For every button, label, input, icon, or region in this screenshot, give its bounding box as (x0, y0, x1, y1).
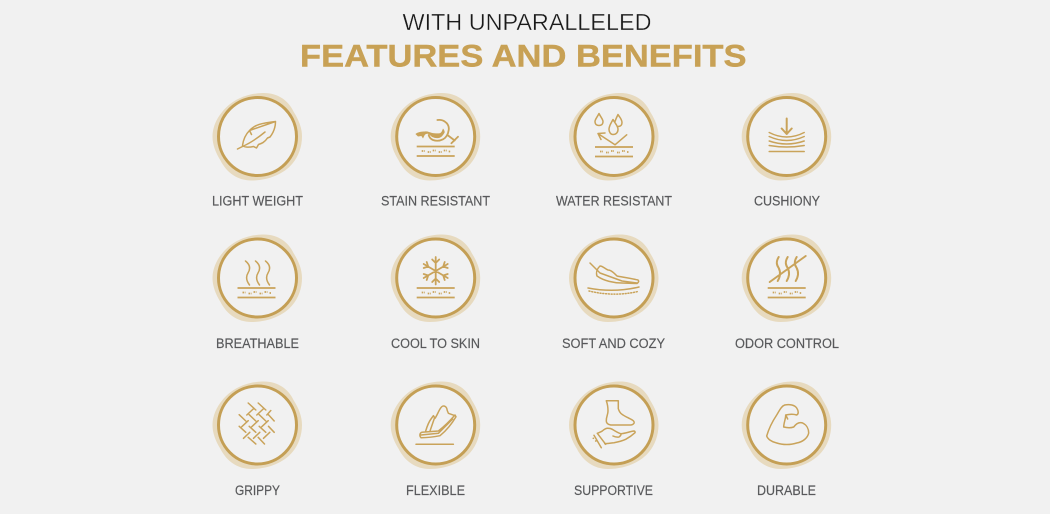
label: STAIN RESISTANT (381, 194, 490, 209)
icon: feather (212, 93, 302, 180)
feature: supportive (569, 381, 658, 498)
label: COOL TO SKIN (391, 336, 480, 351)
icon: feather on cushion (569, 234, 658, 322)
feature: water resistant (556, 93, 672, 209)
label: ODOR CONTROL (735, 336, 839, 351)
icon: wine glass stain (391, 93, 480, 180)
label: GRIPPY (235, 483, 280, 498)
feature: grippy (212, 381, 302, 498)
label: DURABLE (757, 483, 816, 498)
label: CUSHIONY (754, 194, 820, 209)
icon: flexing shoe (391, 381, 480, 469)
label: WATER RESISTANT (556, 194, 672, 209)
label: SOFT AND COZY (562, 336, 665, 351)
icon: flexed arm (742, 381, 831, 469)
feature: flexible (391, 381, 480, 498)
feature: cushiony (742, 93, 831, 209)
icon: compressed layers (742, 93, 831, 180)
feature: odor control (735, 234, 839, 351)
label: LIGHT WEIGHT (212, 194, 303, 209)
feature: breathable (212, 234, 302, 351)
feature: light weight (212, 93, 303, 209)
feature: cool to skin (391, 234, 480, 351)
feature: durable (742, 381, 831, 498)
icon: vapour waves (212, 234, 302, 322)
icon: woven texture (212, 381, 302, 469)
icon: crossed odor waves (742, 234, 831, 322)
title: with unparalleled: WITH UNPARALLELED (402, 9, 652, 35)
icon: snowflake (391, 234, 480, 322)
icon: water drops (569, 93, 658, 180)
label: BREATHABLE (216, 336, 299, 351)
heading: features and benefits: FEATURES AND BENEFITS (300, 38, 746, 74)
feature: stain resistant (381, 93, 490, 209)
icon: foot on hand (569, 381, 658, 469)
label: SUPPORTIVE (574, 483, 653, 498)
label: FLEXIBLE (406, 483, 465, 498)
feature: soft and cozy (562, 234, 665, 351)
